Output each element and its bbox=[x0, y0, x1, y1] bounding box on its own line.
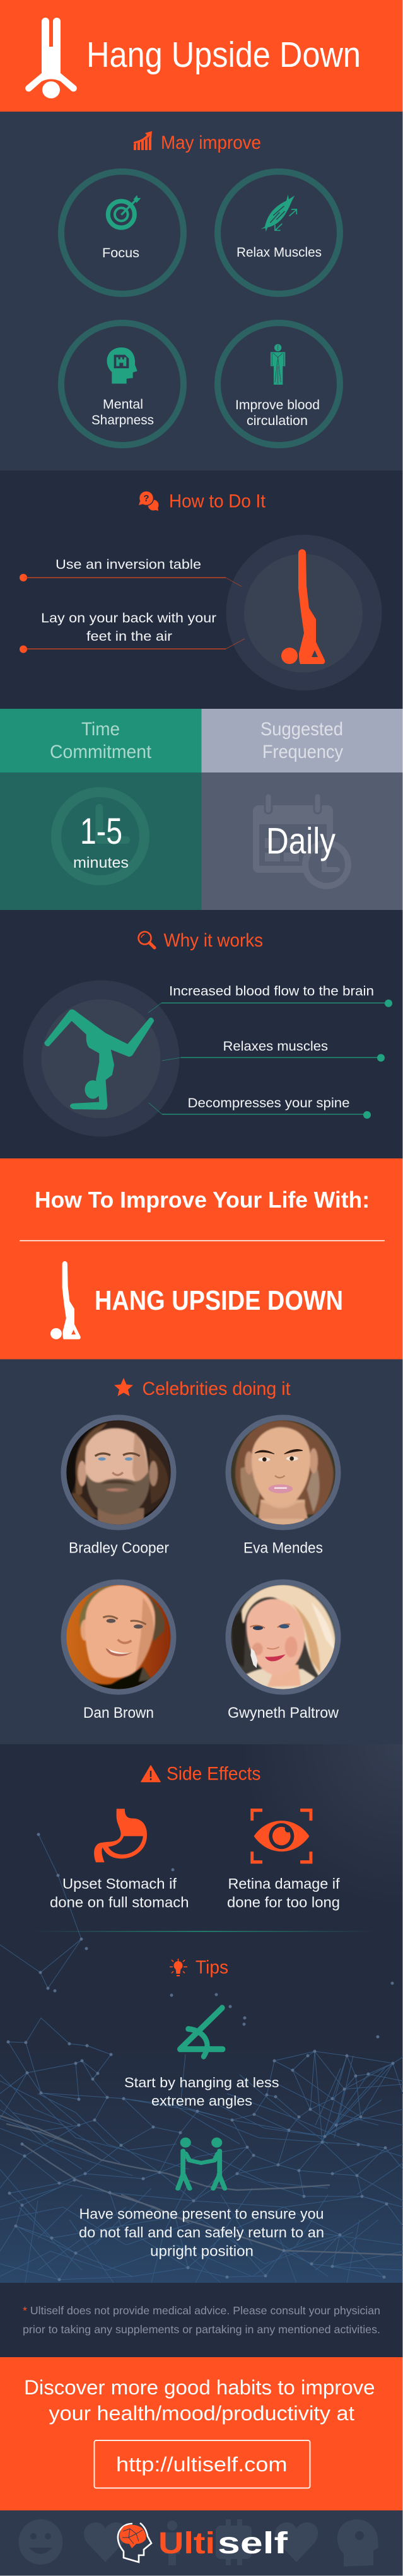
side effect: retina damage bbox=[227, 1810, 340, 1911]
celebrity: bradley cooper bbox=[64, 1418, 173, 1556]
heading: suggested frequency: Frequency bbox=[262, 742, 343, 762]
tip: less extreme angles bbox=[124, 2008, 279, 2109]
panel: may improve bbox=[0, 112, 402, 470]
callout: use an inversion table: Use an inversion table bbox=[55, 557, 201, 572]
icon: circulatory body bbox=[271, 344, 285, 385]
header banner bbox=[0, 0, 402, 112]
call to action text bbox=[24, 2376, 375, 2425]
benefit: mental sharpness: Sharpness bbox=[91, 412, 154, 428]
icon: person hanging upside down bbox=[25, 18, 77, 98]
logo: ultiself bbox=[118, 2523, 288, 2562]
icon: clock bbox=[56, 792, 144, 880]
disclaimer: prior to taking any supplements or partaking in any mentioned activities. bbox=[23, 2323, 380, 2336]
stat: 1-5 minutes: 1-5 bbox=[80, 811, 122, 852]
illustration: headstand in circle bbox=[226, 535, 382, 691]
heading: suggested frequency bbox=[260, 719, 343, 762]
benefit: focus bbox=[61, 172, 184, 294]
call to action text: Discover more good habits to improve bbox=[24, 2376, 375, 2399]
icon: angle bbox=[180, 2008, 223, 2056]
stat: 1-5 minutes: minutes bbox=[73, 854, 129, 871]
faint background icons bbox=[19, 2519, 378, 2567]
tip: have someone present: do not fall and can safely return to an bbox=[79, 2224, 324, 2241]
icon: two people shaking hands bbox=[178, 2138, 225, 2189]
panel: why it works bbox=[0, 910, 402, 1158]
icon: head with castle bbox=[107, 347, 137, 383]
callout: lay on your back: feet in the air bbox=[86, 629, 172, 644]
name: Gwyneth Paltrow bbox=[228, 1705, 339, 1722]
heading: side effects: Side Effects bbox=[166, 1763, 261, 1785]
callout: use an inversion table bbox=[20, 557, 242, 586]
button: url bbox=[95, 2440, 310, 2488]
icon: muscle bbox=[260, 195, 296, 231]
benefit: improve blood circulation: Improve blood bbox=[235, 397, 320, 412]
callout: lay on your back: Lay on your back with your bbox=[41, 610, 216, 626]
disclaimer bbox=[23, 2304, 380, 2336]
side effect: retina damage: done for too long bbox=[227, 1894, 340, 1911]
heading: why it works: Why it works bbox=[164, 930, 263, 951]
side effect: upset stomach bbox=[50, 1809, 189, 1911]
logo: ultiself: Ulti bbox=[158, 2527, 215, 2560]
benefit: focus: Focus bbox=[102, 245, 139, 260]
heading: suggested frequency: Suggested bbox=[260, 719, 343, 740]
panel: celebrities doing it bbox=[0, 1360, 402, 1744]
name: Dan Brown bbox=[83, 1705, 154, 1722]
name: Eva Mendes bbox=[243, 1540, 323, 1556]
heading: time commitment: Commitment bbox=[50, 742, 152, 762]
icon: eye in brackets bbox=[252, 1810, 311, 1862]
icon: calendar and clock bbox=[253, 793, 348, 886]
benefit: mental sharpness: Mental bbox=[103, 397, 143, 412]
panel: time commitment bbox=[0, 709, 202, 910]
callout: decompresses your spine bbox=[149, 1095, 371, 1119]
side effect: upset stomach: done on full stomach bbox=[50, 1894, 189, 1911]
heading: how to do it: ? bbox=[143, 493, 149, 504]
panel: footer bbox=[0, 2510, 402, 2575]
tip: less extreme angles: Start by hanging at less bbox=[124, 2075, 279, 2090]
illustration: scorpion pose in circle bbox=[23, 980, 179, 1136]
callout: lay on your back bbox=[20, 610, 245, 653]
heading: may improve: May improve bbox=[161, 132, 261, 153]
panel: call to action bbox=[0, 2357, 402, 2510]
icon: stomach bbox=[94, 1809, 147, 1862]
heading: tips: Tips bbox=[196, 1957, 228, 1978]
icon: white headstand bbox=[50, 1261, 81, 1339]
heading: time commitment: Time bbox=[81, 719, 120, 740]
panel: suggested frequency bbox=[202, 709, 402, 910]
tip: less extreme angles: extreme angles bbox=[151, 2093, 252, 2109]
heading: how to improve your life: How To Improve Your Life With: bbox=[35, 1187, 370, 1213]
side effect: upset stomach: Upset Stomach if bbox=[62, 1875, 177, 1892]
callout: increased blood flow: Increased blood flow to the brain bbox=[169, 984, 374, 999]
heading: tips bbox=[170, 1957, 228, 1978]
disclaimer: * Ultiself does not provide medical advice. Please consult your physician bbox=[23, 2304, 380, 2317]
callout: relaxes muscles bbox=[162, 1039, 385, 1062]
celebrity: dan brown bbox=[64, 1582, 173, 1722]
button: url: http://ultiself.com bbox=[116, 2453, 288, 2476]
tip: have someone present: upright position bbox=[150, 2242, 254, 2259]
heading: time commitment bbox=[50, 719, 152, 762]
celebrity: gwyneth paltrow bbox=[228, 1582, 339, 1722]
name: Bradley Cooper bbox=[69, 1540, 169, 1556]
background: constellation network bbox=[0, 1834, 403, 2283]
heading: celebrities: Celebrities doing it bbox=[143, 1378, 291, 1399]
benefit: improve blood circulation: circulation bbox=[247, 413, 308, 428]
panel: how to do it bbox=[0, 470, 402, 709]
portrait: eva mendes bbox=[229, 1419, 339, 1527]
callout: increased blood flow bbox=[148, 984, 392, 1013]
call to action text: your health/mood/productivity at bbox=[49, 2402, 354, 2425]
benefit: improve blood circulation bbox=[218, 323, 340, 445]
side effect: retina damage: Retina damage if bbox=[228, 1875, 340, 1892]
benefit: relax muscles: Relax Muscles bbox=[237, 245, 322, 260]
heading: hang upside down: HANG UPSIDE DOWN bbox=[95, 1285, 343, 1316]
tip: have someone present bbox=[79, 2138, 324, 2259]
panel: side effects and tips bbox=[0, 1744, 403, 2357]
callout: decompresses your spine: Decompresses your spine bbox=[188, 1095, 349, 1110]
benefit: mental sharpness bbox=[61, 323, 184, 445]
panel: how to improve your life banner bbox=[0, 1158, 402, 1360]
icon: brain head bbox=[118, 2523, 151, 2562]
benefit: relax muscles bbox=[218, 172, 340, 294]
portrait: bradley cooper bbox=[65, 1419, 172, 1527]
icon: target bbox=[108, 195, 141, 228]
portrait: dan brown bbox=[65, 1584, 172, 1691]
heading: how to do it: How to Do It bbox=[169, 491, 266, 512]
logo: ultiself: self bbox=[218, 2527, 288, 2560]
callout: relaxes muscles: Relaxes muscles bbox=[223, 1039, 328, 1054]
title: Hang Upside Down bbox=[86, 35, 361, 75]
tip: have someone present: Have someone present to ensure you bbox=[79, 2206, 324, 2222]
stat: 1-5 minutes bbox=[73, 811, 129, 871]
portrait: gwyneth paltrow bbox=[229, 1584, 339, 1691]
celebrity: eva mendes bbox=[228, 1418, 339, 1556]
stat: daily: Daily bbox=[266, 821, 336, 861]
